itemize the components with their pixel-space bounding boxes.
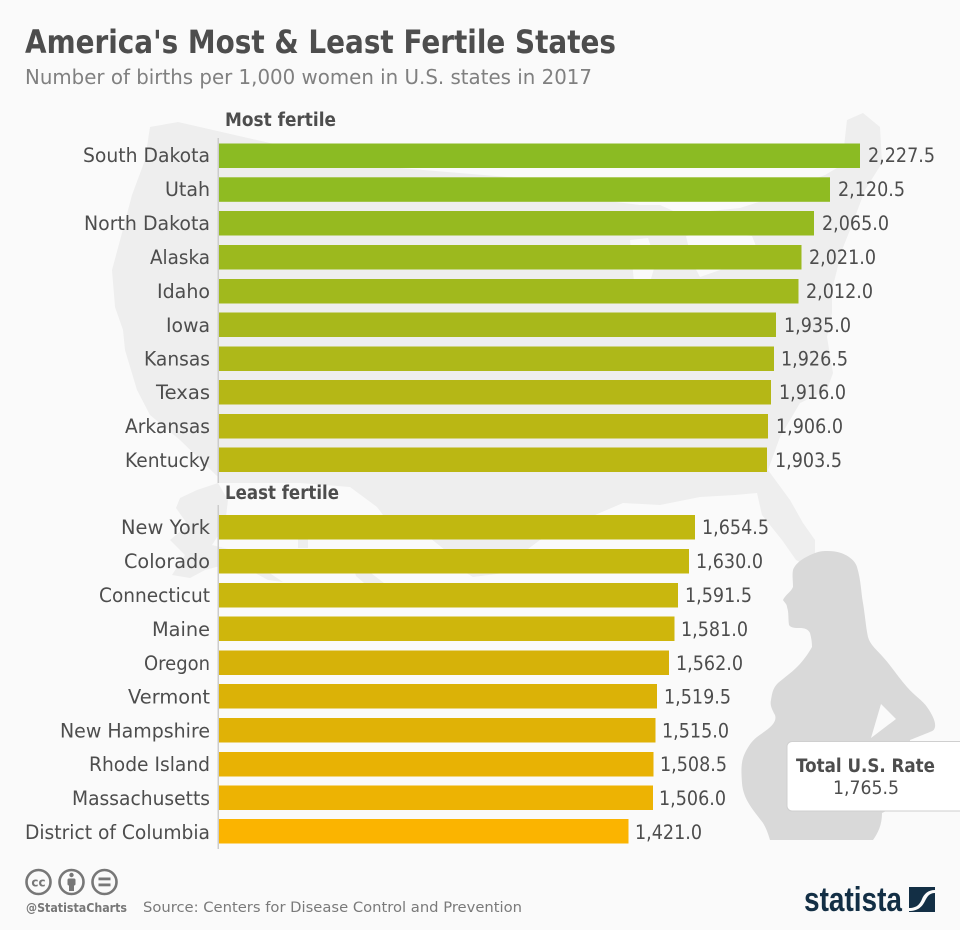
- row: New York: 1,654.5: [702, 516, 769, 539]
- bar chart: most fertile states: [83, 144, 935, 472]
- row: Iowa: 1,935.0: [784, 314, 851, 337]
- row: Oregon: Oregon: [144, 652, 210, 675]
- row: New York: New York: [121, 516, 211, 539]
- statista wordmark: statista: [804, 881, 903, 919]
- row: District of Columbia: 1,421.0: [635, 821, 702, 844]
- row: Kansas: Kansas: [144, 348, 210, 370]
- row: Arkansas: 1,906.0: [776, 415, 843, 438]
- row: Rhode Island: Rhode Island: [89, 753, 210, 776]
- source: Source: Centers for Disease Control and Prevention: [143, 900, 522, 916]
- row: New York: [121, 515, 769, 540]
- row: Connecticut: Connecticut: [99, 584, 210, 607]
- row: Utah: 2,120.5: [838, 178, 905, 201]
- row: South Dakota: South Dakota: [83, 144, 210, 167]
- woman silhouette: [741, 551, 935, 840]
- row: Alaska: 2,021.0: [809, 246, 876, 269]
- row: District of Columbia: [25, 819, 702, 844]
- callout: total U.S. rate: 1,765.5: [833, 777, 899, 799]
- axis line: most fertile: [218, 138, 219, 483]
- row: Alaska: [150, 245, 876, 270]
- row: New Hampshire: New Hampshire: [60, 720, 210, 742]
- row: North Dakota: [84, 211, 889, 236]
- row: Iowa: Iowa: [166, 314, 210, 337]
- row: Alaska: Alaska: [150, 246, 210, 269]
- row: Kentucky: [125, 448, 842, 472]
- axis line: least fertile: [218, 505, 219, 849]
- callout: total U.S. rate: [787, 742, 960, 811]
- row: Maine: 1,581.0: [681, 618, 748, 641]
- row: North Dakota: 2,065.0: [822, 212, 889, 235]
- icon: no derivatives equals: [92, 870, 116, 894]
- row: North Dakota: North Dakota: [84, 212, 210, 235]
- subtitle: Number of births per 1,000 women in U.S. states in 2017: [25, 65, 592, 89]
- row: Utah: Utah: [165, 178, 210, 201]
- row: District of Columbia: District of Columbia: [25, 821, 210, 844]
- row: Connecticut: [99, 583, 752, 608]
- row: Idaho: [157, 279, 873, 304]
- row: Vermont: [128, 684, 731, 708]
- row: Oregon: [144, 650, 743, 675]
- row: Texas: Texas: [155, 381, 210, 404]
- row: Vermont: Vermont: [128, 686, 210, 708]
- row: Maine: [152, 616, 748, 641]
- row: Texas: [155, 380, 846, 404]
- row: Connecticut: 1,591.5: [685, 584, 752, 607]
- statista logo icon: [909, 887, 935, 912]
- bar chart: least fertile states: [25, 515, 769, 844]
- row: Idaho: 2,012.0: [806, 280, 873, 303]
- row: Massachusetts: [72, 786, 726, 810]
- row: Idaho: Idaho: [157, 280, 210, 303]
- row: Oregon: 1,562.0: [676, 652, 743, 675]
- row: Kansas: 1,926.5: [781, 348, 848, 370]
- row: Kansas: [144, 346, 848, 371]
- row: Colorado: Colorado: [124, 550, 210, 573]
- row: Iowa: [166, 312, 851, 337]
- row: South Dakota: [83, 144, 935, 168]
- credit handle: @StatistaCharts: [26, 901, 127, 915]
- row: Massachusetts: 1,506.0: [659, 787, 726, 810]
- icon: creative commons: cc: [31, 876, 46, 890]
- row: New Hampshire: 1,515.0: [662, 720, 729, 742]
- row: Colorado: [124, 549, 763, 574]
- row: Colorado: 1,630.0: [696, 550, 763, 573]
- icon: attribution person: [60, 870, 84, 894]
- heading: least fertile: Least fertile: [225, 483, 339, 504]
- row: Rhode Island: 1,508.5: [660, 753, 727, 776]
- row: Vermont: 1,519.5: [664, 686, 731, 708]
- row: Texas: 1,916.0: [779, 381, 846, 404]
- row: Maine: Maine: [152, 618, 210, 641]
- title: America's Most & Least Fertile States: [25, 23, 616, 61]
- row: Arkansas: [125, 414, 843, 438]
- row: South Dakota: 2,227.5: [868, 144, 935, 167]
- row: Massachusetts: Massachusetts: [72, 787, 210, 810]
- background map of the United States: [112, 113, 882, 590]
- callout: total U.S. rate: Total U.S. Rate: [796, 756, 935, 777]
- row: Kentucky: 1,903.5: [775, 449, 842, 472]
- row: Rhode Island: [89, 752, 727, 776]
- row: Arkansas: Arkansas: [125, 415, 210, 438]
- row: Kentucky: Kentucky: [125, 449, 210, 472]
- row: Utah: [165, 177, 905, 202]
- icon: creative commons: [26, 870, 50, 894]
- row: New Hampshire: [60, 718, 729, 742]
- heading: most fertile: Most fertile: [225, 110, 336, 131]
